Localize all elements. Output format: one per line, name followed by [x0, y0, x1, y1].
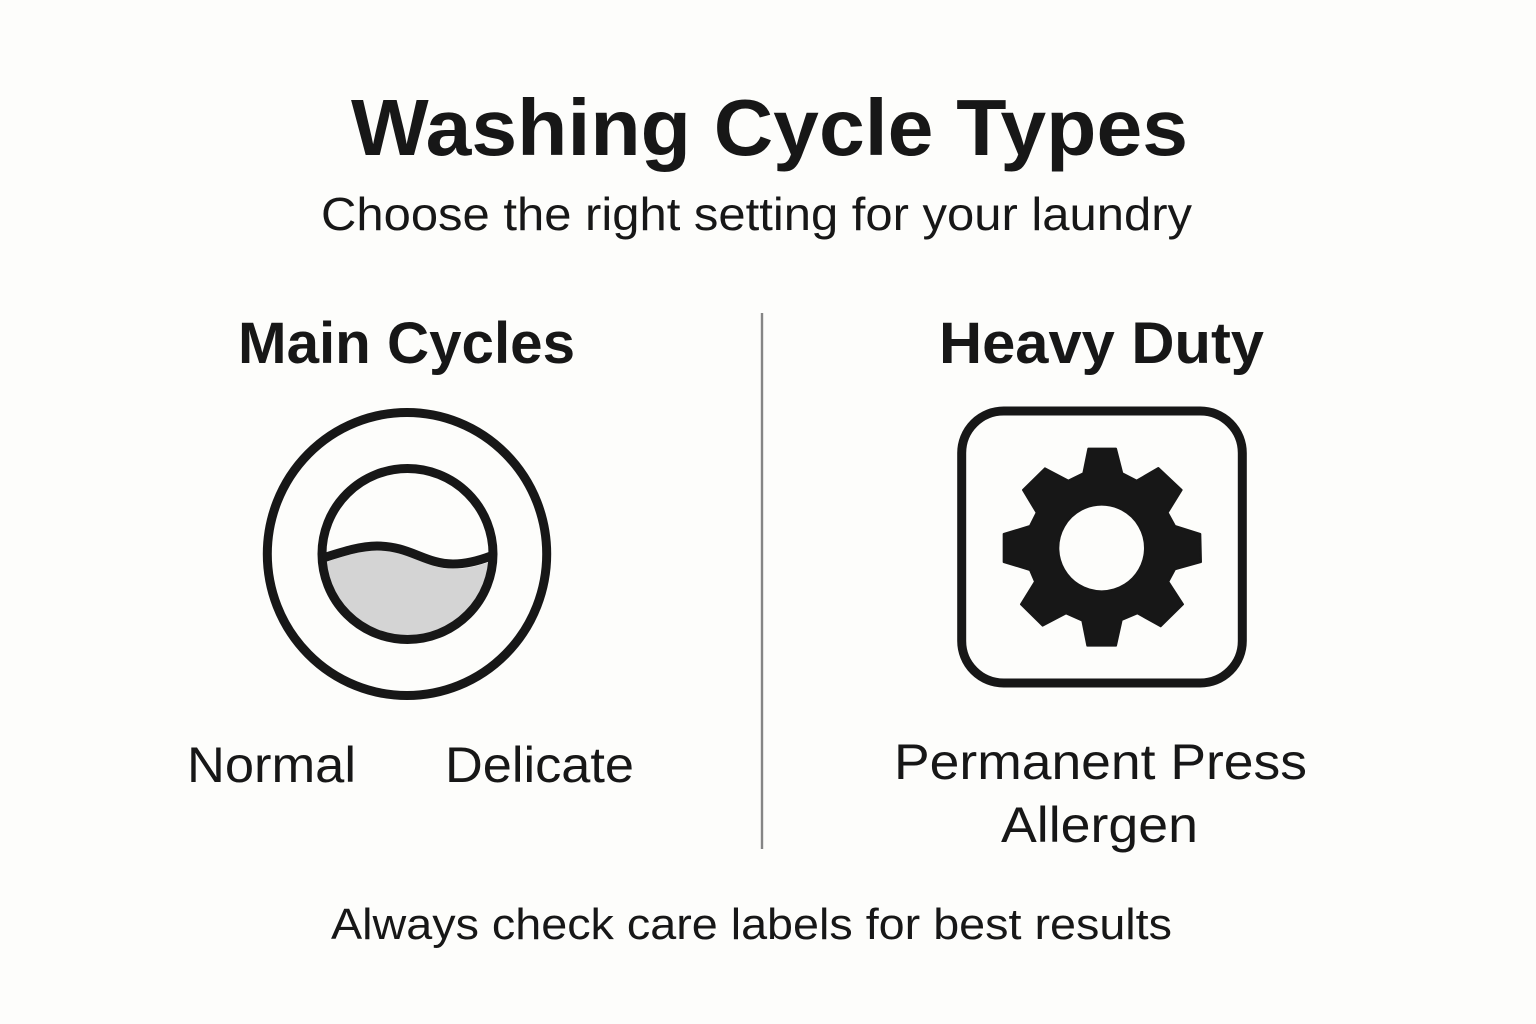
icon: washing machine drum with water	[267, 412, 547, 696]
icon: gear in rounded square	[962, 411, 1242, 683]
title: Washing Cycle Types	[351, 83, 1188, 172]
label: normal: Normal	[187, 737, 356, 793]
panel: main cycles	[187, 311, 634, 793]
heading: main cycles: Main Cycles	[238, 311, 575, 376]
label: permanent press: Permanent Press	[894, 734, 1307, 790]
label: delicate: Delicate	[445, 737, 634, 793]
panel: heavy duty	[894, 311, 1307, 853]
heading: heavy duty: Heavy Duty	[939, 311, 1264, 376]
subtitle: Choose the right setting for your laundry	[321, 188, 1192, 240]
footer note: Always check care labels for best results	[331, 900, 1172, 949]
label: allergen: Allergen	[1001, 797, 1198, 853]
